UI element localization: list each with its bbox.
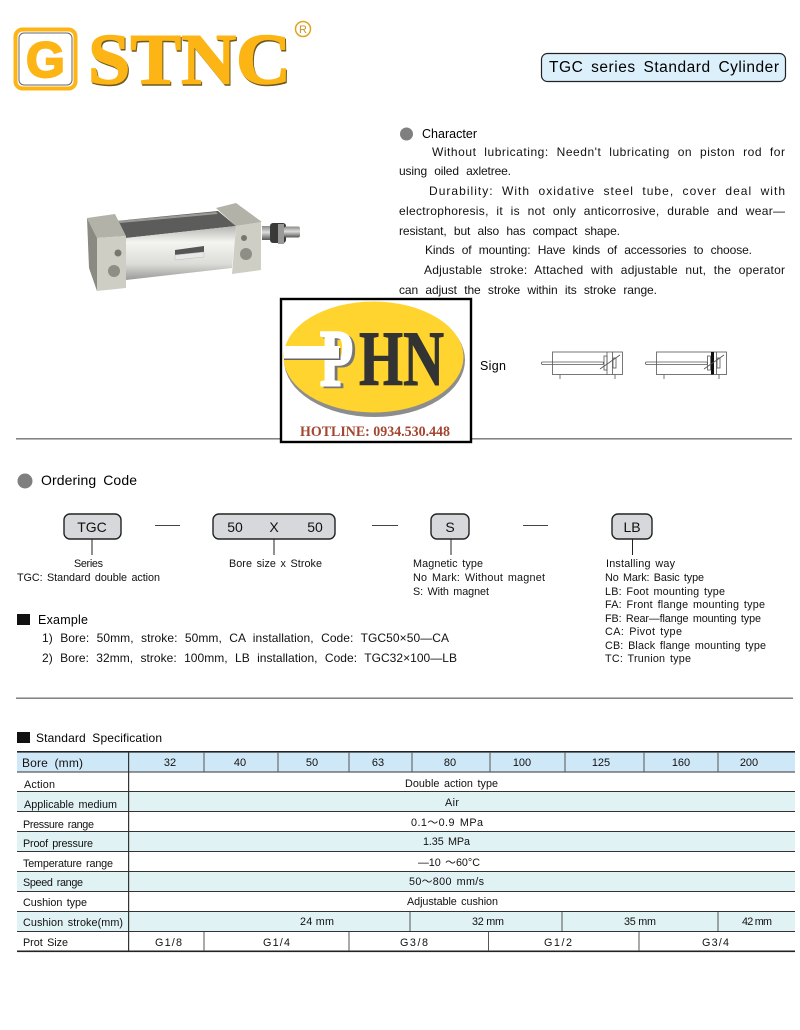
code box: S: S [445, 519, 455, 535]
logo wordmark shadow: STNC [89, 21, 292, 101]
divider top [16, 438, 792, 440]
sign label: Sign [480, 359, 506, 373]
magnetic type description [413, 558, 545, 598]
header row: 40 [234, 757, 246, 769]
heading: standard specification: Standard Specification [36, 731, 162, 745]
header row: 100 [513, 757, 531, 769]
panel: ordering code [17, 472, 766, 665]
code box: S [431, 514, 469, 555]
logo wordmark: STNC [88, 20, 291, 100]
nameplate [175, 246, 204, 260]
heading: example: Example [38, 613, 88, 627]
icon: G emblem: G [26, 32, 65, 88]
installing way description: No Mark: Basic type [605, 572, 704, 584]
port size values [155, 937, 729, 949]
port size values: G1/2 [544, 937, 572, 949]
letter P [284, 315, 356, 405]
text block: character description: can adjust the stroke within its stroke range. [399, 283, 657, 297]
code box: TGC: TGC [77, 519, 107, 535]
heading: character: Character [422, 127, 477, 141]
stamp: PHN hotline logo [281, 299, 471, 442]
row values: 50～800 mm/s [409, 876, 485, 888]
rod end [262, 223, 300, 244]
code box: bore x stroke [213, 514, 335, 555]
icon: G emblem [16, 30, 76, 88]
tube body [126, 226, 236, 280]
text block: character description: resistant, but also has compact shape. [399, 224, 620, 238]
row labels: Pressure range [23, 819, 94, 831]
text block: character description: Kinds of mounting: Have kinds of accessories to choose. [425, 243, 752, 257]
row labels: Applicable medium [24, 799, 117, 811]
code box: TGC [64, 514, 121, 555]
header row: Bore (mm) [22, 756, 83, 770]
table row shading [17, 752, 795, 931]
series description: Series [74, 558, 104, 570]
code box: bore x stroke: 50 [227, 519, 243, 535]
logo: STNC brand [16, 20, 310, 101]
text block: character description: using oiled axletree. [399, 164, 511, 178]
title badge: TGC series Standard Cylinder [549, 59, 779, 76]
cushion stroke values: 32 mm [472, 916, 504, 928]
symbol: cylinder without magnet [542, 352, 622, 379]
row labels [23, 779, 123, 949]
text block: character description: electrophoresis, it is not only anticorrosive, durable and wear— [399, 204, 785, 218]
divider middle [16, 698, 793, 699]
installing way description: Installing way [606, 558, 676, 570]
table: standard specification [17, 751, 795, 952]
magnetic type description: S: With magnet [413, 586, 489, 598]
header row [22, 756, 758, 770]
row values: Double action type [405, 778, 498, 790]
symbol: cylinder with magnet [646, 352, 726, 379]
product photo: pneumatic cylinder [87, 203, 300, 291]
header row: 160 [672, 757, 690, 769]
code box: bore x stroke: X [269, 519, 279, 535]
letter P: P [320, 315, 353, 403]
example lines: 2) Bore: 32mm, stroke: 100mm, LB installation, Code: TGC32×100—LB [42, 651, 457, 665]
cushion stroke values: 42 mm [742, 916, 772, 928]
installing way description: CA: Pivot type [605, 626, 682, 638]
port size values: G3/8 [400, 937, 428, 949]
text block: character description: Without lubricating: Needn't lubricating on piston rod for [432, 145, 785, 159]
table rules [17, 751, 795, 952]
letter P: P [323, 317, 356, 405]
letters HN: HN [359, 315, 444, 402]
tube top channel [116, 211, 236, 238]
cushion stroke values: 35 mm [624, 916, 656, 928]
title badge [542, 54, 786, 82]
row values: —10 ～60°C [418, 857, 480, 869]
text block: character description: Adjustable stroke: Attached with adjustable nut, the operator [424, 263, 785, 277]
series description: TGC: Standard double action [17, 572, 160, 584]
header row: 80 [444, 757, 456, 769]
installing way description [605, 558, 766, 665]
header row: 125 [592, 757, 610, 769]
port size values: G3/4 [702, 937, 729, 949]
row values [405, 778, 498, 908]
header row: 50 [306, 757, 318, 769]
code box: LB [612, 514, 652, 555]
installing way description: LB: Foot mounting type [605, 586, 725, 598]
header row: 32 [164, 757, 176, 769]
row labels: Proof pressure [23, 838, 93, 850]
heading: ordering code: Ordering Code [41, 472, 137, 488]
row labels: Prot Size [23, 937, 68, 949]
port size values: G1/8 [155, 937, 182, 949]
row labels: Cushion type [23, 897, 87, 909]
logo ellipse [284, 302, 465, 417]
example lines: 1) Bore: 50mm, stroke: 50mm, CA installation, Code: TGC50×50—CA [42, 631, 449, 645]
text block: character description [399, 145, 785, 297]
dash [523, 525, 548, 526]
code box: LB: LB [623, 519, 641, 535]
installing way description: TC: Trunion type [605, 653, 691, 665]
header row: 200 [740, 757, 758, 769]
code box: bore x stroke: 50 [307, 519, 323, 535]
row values: 1.35 MPa [423, 836, 470, 848]
magnetic type description: Magnetic type [413, 558, 483, 570]
panel: character [399, 127, 785, 297]
cushion stroke values [300, 916, 772, 928]
panel: example [17, 613, 457, 665]
dash [372, 525, 398, 526]
row values: 0.1～0.9 MPa [411, 817, 483, 829]
example lines [42, 631, 457, 665]
front end block [216, 203, 262, 274]
installing way description: FA: Front flange mounting type [605, 599, 765, 611]
row labels: Temperature range [23, 858, 113, 870]
row values: Air [445, 797, 459, 809]
hotline: HOTLINE: 0934.530.448 [300, 424, 450, 440]
dash [155, 525, 180, 526]
installing way description: CB: Black flange mounting type [605, 640, 766, 652]
cushion stroke values: 24 mm [300, 916, 334, 928]
port size values: G1/4 [263, 937, 290, 949]
magnetic type description: No Mark: Without magnet [413, 572, 545, 584]
icon: character bullet [400, 128, 413, 140]
rear end block [87, 214, 126, 291]
row values: Adjustable cushion [407, 896, 498, 908]
registered mark [296, 22, 310, 36]
bore size description: Bore size x Stroke [229, 558, 322, 570]
installing way description: FB: Rear—flange mounting type [605, 613, 761, 625]
registered mark: R [299, 24, 307, 36]
icon: example square [17, 614, 30, 625]
header row: 63 [372, 757, 384, 769]
series description [17, 558, 160, 584]
row labels: Cushion stroke(mm) [23, 917, 123, 929]
icon: ordering bullet [18, 474, 32, 488]
text block: character description: Durability: With oxidative steel tube, cover deal with [429, 184, 785, 198]
row labels: Action [24, 779, 55, 791]
row labels: Speed range [23, 877, 83, 889]
